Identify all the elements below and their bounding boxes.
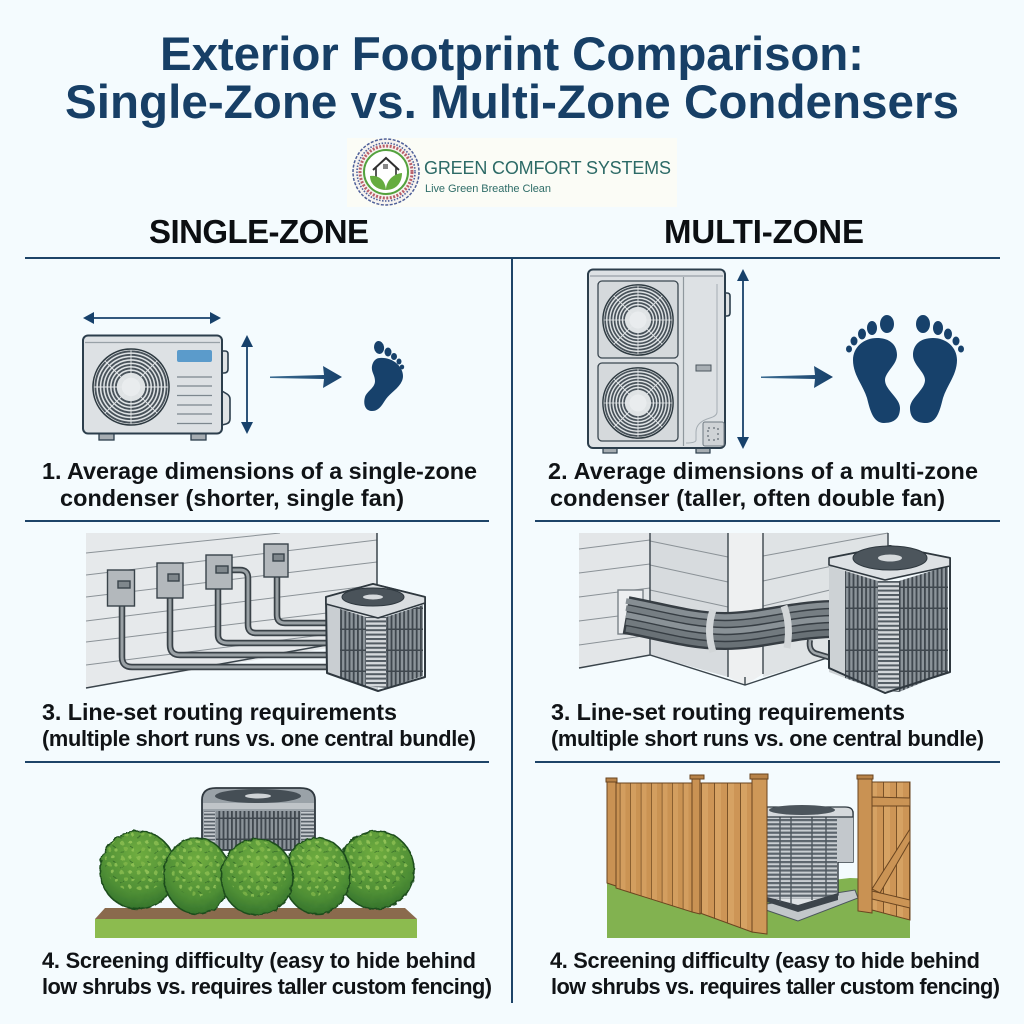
illustration: siding wall <box>86 533 377 688</box>
caption 3 right <box>551 699 984 751</box>
arrow <box>270 366 342 388</box>
panel: single-zone screening <box>42 788 492 999</box>
icon: height arrow <box>241 335 253 434</box>
caption 3 left <box>42 699 476 751</box>
illustration: condenser with bundle <box>829 546 950 693</box>
icon: wall penetration <box>618 590 643 634</box>
illustration: four disconnect boxes <box>108 544 288 606</box>
illustration: single-fan condenser <box>83 336 230 440</box>
caption 3 left: 3. Line-set routing requirements <box>42 699 397 725</box>
illustration: condenser behind fence <box>760 805 858 921</box>
illustration: house corner wall <box>579 533 888 685</box>
icon: height arrow <box>737 269 749 449</box>
caption 1 <box>42 458 477 511</box>
title <box>65 28 959 129</box>
company name: GREEN COMFORT SYSTEMS <box>424 158 671 178</box>
panel: multi-zone dimensions <box>548 269 978 511</box>
panel: single-zone line sets <box>42 533 476 751</box>
arrow <box>761 366 833 388</box>
caption 3 left: (multiple short runs vs. one central bundle) <box>42 726 476 751</box>
title: Single-Zone vs. Multi-Zone Condensers <box>65 76 959 129</box>
caption 2: condenser (taller, often double fan) <box>550 485 945 511</box>
panel: multi-zone line sets <box>551 533 984 751</box>
caption 2 <box>548 458 978 511</box>
heading: single-zone: SINGLE-ZONE <box>149 213 369 250</box>
caption 4 right <box>550 948 1000 999</box>
caption 1: 1. Average dimensions of a single-zone <box>42 458 477 484</box>
panel: single-zone dimensions <box>42 312 477 511</box>
panel: multi-zone screening <box>550 774 1000 999</box>
icon: mandala house badge <box>353 139 419 205</box>
illustration: low condenser behind shrubs <box>202 788 315 850</box>
illustration: fence gate <box>857 775 910 920</box>
tagline: Live Green Breathe Clean <box>425 183 551 195</box>
illustration: four line-set runs <box>122 570 330 667</box>
icon: width arrow <box>83 312 221 324</box>
illustration: five shrubs <box>100 831 414 915</box>
caption 3 right: 3. Line-set routing requirements <box>551 699 905 725</box>
caption 4 left: 4. Screening difficulty (easy to hide behind <box>42 948 476 973</box>
icon: one footprint <box>364 340 404 411</box>
illustration: grass <box>607 878 910 938</box>
caption 2: 2. Average dimensions of a multi-zone <box>548 458 978 484</box>
caption 3 right: (multiple short runs vs. one central bundle) <box>551 726 984 751</box>
caption 4 left <box>42 948 492 999</box>
illustration: soil and grass <box>95 908 417 938</box>
illustration: central line-set bundle <box>626 601 838 660</box>
heading: multi-zone: MULTI-ZONE <box>664 213 864 250</box>
caption 1: condenser (shorter, single fan) <box>60 485 404 511</box>
caption 4 right: low shrubs vs. requires taller custom fencing) <box>551 974 1000 999</box>
illustration: condenser with single runs <box>326 584 425 691</box>
caption 4 right: 4. Screening difficulty (easy to hide behind <box>550 948 980 973</box>
logo: Green Comfort Systems <box>347 138 677 207</box>
title: Exterior Footprint Comparison: <box>160 28 864 81</box>
caption 4 left: low shrubs vs. requires taller custom fencing) <box>42 974 492 999</box>
illustration: double-fan condenser <box>588 270 730 453</box>
illustration: wooden fence <box>606 774 768 934</box>
icon: two footprints <box>846 315 964 423</box>
